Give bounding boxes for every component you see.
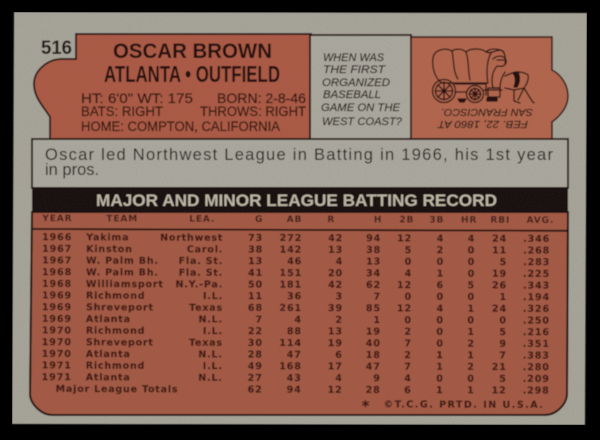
upside-down answer: FEB. 22, 1860 AT (437, 118, 528, 129)
row: 1969 Richmond: 3 (335, 291, 343, 302)
row: 1968 W. Palm Bh.: Fla. St. (179, 268, 223, 279)
row: 1967 W. Palm Bh.: 5 (500, 257, 507, 268)
row: 1969 Richmond (42, 290, 550, 303)
copyright line (362, 397, 544, 416)
upside-down answer: SAN FRANCISCO. (441, 106, 533, 117)
row: 1969 Atlanta: 0 (404, 315, 412, 326)
throws: THROWS: RIGHT (200, 104, 306, 119)
row: 1970 Atlanta: 1 (436, 350, 444, 361)
row: 1971 Atlanta: Atlanta (86, 372, 131, 383)
row: 1970 Shreveport: Texas (189, 338, 223, 349)
row: 1970 Shreveport: 30 (248, 338, 263, 349)
row: Major League Totals: Major League Totals (56, 384, 178, 395)
row: 1970 Richmond: 1 (467, 327, 475, 338)
row: 1969 Atlanta: 1969 (42, 314, 72, 325)
row: 1968 Williamsport: 5 (468, 280, 475, 291)
row: 1970 Richmond: 2 (404, 327, 412, 338)
table header: 2B (399, 215, 414, 225)
row: 1968 W. Palm Bh.: 34 (366, 268, 381, 279)
panel: batting record table background (30, 212, 568, 415)
row: 1969 Shreveport: 24 (492, 304, 507, 315)
row: 1970 Shreveport: 40 (366, 338, 381, 349)
row: 1970 Atlanta: 1 (467, 350, 475, 361)
row: 1967 Kinston: Carol. (187, 244, 223, 255)
row: 1970 Shreveport: 0 (436, 338, 444, 350)
row: 1967 W. Palm Bh.: Fla. St. (179, 256, 223, 267)
row: 1969 Shreveport: 12 (397, 303, 412, 314)
row: 1969 Shreveport: 39 (328, 303, 343, 314)
row: 1967 Kinston: Kinston (86, 244, 133, 255)
row: 1966 Yakima: Northwest (160, 233, 223, 244)
row: 1968 Williamsport: 26 (492, 280, 507, 291)
row: 1967 Kinston: 5 (405, 245, 412, 256)
row: 1971 Richmond: 17 (328, 361, 343, 372)
row: 1968 W. Palm Bh.: 1 (437, 268, 444, 280)
row: 1971 Richmond: 47 (366, 362, 381, 373)
row: Major League Totals: 28 (366, 385, 381, 396)
row: 1968 Williamsport: .343 (523, 280, 550, 292)
height and weight: HT: 6'0" WT: 175 (81, 91, 193, 106)
heading bar (32, 187, 568, 213)
icon: covered wagon (432, 49, 534, 103)
row: 1969 Richmond: Richmond (86, 291, 145, 302)
row: 1970 Atlanta: 1970 (42, 349, 72, 360)
row: 1966 Yakima: 12 (397, 233, 412, 244)
row: 1969 Richmond: 0 (436, 292, 444, 303)
row: 1971 Richmond: Richmond (86, 361, 145, 372)
panel: trivia question: BASEBALL (323, 89, 381, 101)
table (32, 214, 568, 416)
row: 1968 W. Palm Bh.: 4 (405, 268, 412, 279)
row: 1970 Atlanta: N.L. (198, 349, 223, 360)
row: 1971 Atlanta: 9 (373, 373, 381, 384)
row: 1968 Williamsport: 42 (328, 280, 343, 291)
row: 1969 Atlanta: 0 (467, 315, 475, 326)
row: 1967 W. Palm Bh.: 4 (336, 256, 343, 267)
row: 1967 Kinston: 13 (328, 245, 343, 256)
row: 1970 Atlanta: .383 (523, 350, 550, 362)
table header: H (374, 215, 382, 225)
row: 1970 Richmond: 22 (248, 326, 263, 337)
team and position: ATLANTA • OUTFIELD (104, 61, 280, 87)
row: 1967 Kinston: 0 (468, 245, 475, 256)
panel: trivia question: ORGANIZED (322, 77, 390, 89)
row: 1970 Richmond: 13 (328, 326, 343, 337)
row: 1970 Shreveport: 7 (404, 338, 412, 349)
row: 1970 Richmond: .216 (523, 327, 550, 338)
table header: RBI (490, 216, 510, 226)
panel: trivia question: GAME ON THE (321, 102, 401, 114)
row: Major League Totals: 1 (467, 385, 475, 396)
row: 1970 Shreveport: 9 (499, 339, 507, 350)
row: 1966 Yakima: 4 (437, 233, 444, 245)
row: 1969 Shreveport: Shreveport (86, 302, 154, 313)
row: 1968 W. Palm Bh.: 1968 (42, 267, 72, 278)
panel: trivia question: THE FIRST (323, 64, 386, 76)
row: 1971 Atlanta: 0 (467, 374, 475, 385)
row: 1971 Atlanta: 43 (287, 373, 302, 384)
row: 1967 W. Palm Bh.: 46 (287, 256, 302, 267)
row: 1969 Richmond: 0 (467, 292, 475, 303)
row: 1970 Richmond: 0 (436, 327, 444, 338)
row: 1970 Atlanta: 7 (499, 350, 507, 361)
row: 1968 W. Palm Bh.: W. Palm Bh. (86, 267, 159, 279)
row: 1968 Williamsport: 181 (280, 280, 302, 291)
row: 1970 Shreveport: .351 (523, 339, 550, 350)
row: 1969 Richmond: I.L. (203, 291, 223, 302)
row: 1971 Atlanta: 27 (248, 373, 263, 384)
row: 1971 Richmond (42, 360, 550, 373)
row: 1968 Williamsport: N.Y.-Pa. (175, 279, 223, 290)
row: 1967 W. Palm Bh.: 0 (468, 257, 475, 268)
row: 1968 W. Palm Bh.: 151 (280, 268, 302, 279)
row: 1966 Yakima: 24 (492, 234, 507, 245)
table header: G (255, 215, 263, 225)
row: 1971 Richmond: 21 (492, 362, 507, 373)
table header: LEA. (189, 215, 215, 225)
row: 1968 W. Palm Bh.: 0 (468, 269, 475, 280)
row: 1971 Richmond: 7 (404, 362, 412, 373)
row: 1971 Atlanta: N.L. (198, 373, 223, 384)
row: 1966 Yakima: 4 (468, 234, 475, 245)
panel: trivia question: WEST COAST? (322, 116, 403, 128)
row: 1968 W. Palm Bh.: 41 (248, 268, 263, 279)
card number: 516 (41, 37, 72, 59)
row: 1968 Williamsport: Williamsport (86, 279, 164, 290)
row: 1968 W. Palm Bh.: 19 (492, 269, 507, 280)
row: 1970 Atlanta: Atlanta (86, 349, 131, 360)
table header: R (327, 215, 335, 225)
panel: trivia answer (411, 37, 568, 140)
row: 1967 Kinston (42, 244, 550, 257)
row: 1971 Richmond: 1971 (42, 360, 72, 372)
panel: biography note: in pros. (45, 161, 99, 179)
row: 1969 Shreveport: 261 (279, 303, 302, 314)
row: 1966 Yakima: 42 (328, 233, 343, 244)
row: 1967 Kinston: 11 (492, 245, 507, 256)
row: 1968 W. Palm Bh.: 20 (328, 268, 343, 279)
row: 1969 Richmond: 1 (499, 292, 507, 303)
row: 1968 Williamsport: 62 (366, 280, 381, 291)
row: 1969 Atlanta: 0 (436, 315, 444, 326)
row: 1969 Richmond: 7 (373, 292, 381, 303)
table header: HR (461, 216, 477, 226)
player name: OSCAR BROWN (113, 40, 272, 63)
heading bar: MAJOR AND MINOR LEAGUE BATTING RECORD (96, 191, 497, 210)
row: 1967 W. Palm Bh.: 13 (366, 257, 381, 268)
row: 1969 Richmond: 0 (404, 292, 412, 303)
row: 1971 Richmond: .280 (523, 362, 550, 373)
row: 1967 Kinston: .268 (523, 245, 550, 257)
copyright line: * (362, 397, 370, 415)
row: Major League Totals: 6 (404, 385, 412, 396)
row: Major League Totals: 62 (248, 385, 263, 396)
row: 1969 Atlanta: Atlanta (86, 314, 131, 325)
row: 1969 Shreveport: 1969 (42, 302, 72, 313)
row: 1967 W. Palm Bh.: 13 (248, 256, 263, 267)
row: 1969 Richmond: 1969 (42, 290, 72, 302)
row: 1968 Williamsport: 12 (397, 280, 412, 291)
row: 1969 Shreveport: 1 (467, 304, 475, 315)
row: 1971 Atlanta: .209 (523, 374, 550, 385)
row: 1970 Shreveport: 1970 (42, 337, 72, 348)
row: 1970 Shreveport: 19 (328, 338, 343, 349)
row: 1969 Richmond: .194 (523, 292, 550, 303)
row: 1970 Richmond: 19 (366, 327, 381, 338)
row: 1969 Atlanta: 7 (255, 315, 263, 326)
row: 1969 Atlanta: N.L. (198, 314, 223, 325)
row: 1970 Richmond: 1970 (42, 325, 72, 337)
row: 1969 Shreveport: .326 (523, 304, 550, 315)
table header (32, 214, 568, 232)
bats: BATS: RIGHT (81, 104, 163, 119)
row: Major League Totals: 1 (436, 385, 444, 396)
row: 1970 Richmond: 88 (287, 326, 302, 337)
row: Major League Totals (56, 384, 550, 397)
row: 1970 Atlanta: 47 (287, 350, 302, 361)
row: 1970 Atlanta: 6 (335, 350, 343, 361)
row: 1970 Richmond: I.L. (203, 326, 223, 337)
row: Major League Totals: 12 (328, 385, 343, 396)
row: 1966 Yakima: .346 (523, 234, 550, 245)
row: 1969 Richmond: 11 (248, 291, 263, 302)
row: 1971 Atlanta (42, 372, 550, 385)
row: 1970 Richmond: 5 (499, 327, 507, 338)
row: 1970 Atlanta: 2 (404, 350, 412, 361)
row: 1970 Richmond (42, 325, 550, 338)
row: 1967 W. Palm Bh. (42, 255, 550, 268)
row: 1971 Richmond: 168 (279, 361, 302, 372)
row: 1970 Atlanta: 28 (248, 350, 263, 361)
row: 1966 Yakima: 94 (366, 233, 381, 244)
row: 1967 Kinston: 142 (280, 245, 302, 256)
row: 1969 Shreveport (42, 302, 550, 315)
row: 1968 Williamsport: 50 (248, 280, 263, 291)
row: 1970 Atlanta: 18 (366, 350, 381, 361)
table header: 3B (429, 215, 444, 226)
row: Major League Totals: 94 (287, 385, 302, 396)
row: 1969 Shreveport: Texas (189, 303, 223, 314)
table header: YEAR (41, 214, 72, 224)
row: 1970 Shreveport: 114 (279, 338, 302, 349)
row: 1971 Atlanta: 1971 (42, 372, 72, 383)
panel: biography note (32, 139, 568, 188)
table header: AVG. (527, 216, 554, 226)
row: 1969 Atlanta: .250 (523, 315, 550, 327)
row: 1967 W. Palm Bh.: 1967 (42, 255, 72, 267)
row: 1969 Shreveport: 85 (366, 303, 381, 314)
row: 1968 W. Palm Bh. (42, 267, 550, 280)
row: 1968 W. Palm Bh.: .225 (523, 269, 550, 280)
row: 1969 Atlanta (42, 314, 550, 327)
row: 1969 Atlanta: 2 (335, 315, 343, 326)
row: 1968 Williamsport: 6 (437, 280, 444, 291)
row: 1967 W. Palm Bh.: 0 (405, 257, 412, 268)
birth date: BORN: 2-8-46 (217, 91, 306, 106)
row: 1967 Kinston: 38 (366, 245, 381, 256)
row: 1970 Richmond: Richmond (86, 326, 145, 337)
row: 1967 Kinston: 1967 (42, 244, 72, 255)
row: 1966 Yakima: 1966 (42, 232, 72, 243)
row: 1969 Atlanta: 4 (294, 315, 302, 326)
panel: biography note: Oscar led Northwest League in Batting in 1966, his 1st year (45, 146, 554, 164)
row: 1967 W. Palm Bh.: 0 (437, 257, 444, 268)
row: Major League Totals: 12 (492, 385, 507, 396)
row: 1971 Richmond: 1 (436, 362, 444, 373)
row: 1970 Shreveport (42, 337, 550, 350)
row: 1971 Richmond: 2 (467, 362, 475, 373)
row: 1969 Richmond: 36 (287, 291, 302, 302)
row: 1971 Atlanta: 4 (404, 373, 412, 384)
row: 1971 Richmond: I.L. (203, 361, 223, 372)
row: 1971 Richmond: 49 (248, 361, 263, 372)
row: 1966 Yakima: Yakima (85, 232, 129, 243)
row: 1971 Atlanta: 0 (436, 373, 444, 385)
panel: player info (34, 34, 311, 139)
row: 1970 Shreveport: 2 (467, 339, 475, 350)
copyright line: ©T.C.G. PRTD. IN U.S.A. (384, 399, 544, 411)
row: 1969 Atlanta: 0 (499, 315, 507, 326)
home town: HOME: COMPTON, CALIFORNIA (81, 119, 280, 134)
row: 1968 Williamsport (42, 279, 550, 292)
row: 1971 Atlanta: 5 (499, 374, 507, 385)
row: 1969 Shreveport: 4 (436, 303, 444, 315)
upside-down answer (437, 106, 533, 129)
row: 1969 Shreveport: 68 (248, 303, 263, 314)
row: 1969 Atlanta: 1 (373, 315, 381, 326)
row: Major League Totals: .298 (523, 385, 550, 397)
row: 1966 Yakima (42, 232, 550, 245)
row: 1967 W. Palm Bh.: .283 (523, 257, 550, 268)
row: 1970 Atlanta (42, 349, 550, 362)
row: 1966 Yakima: 272 (280, 233, 302, 244)
row: 1970 Shreveport: Shreveport (86, 337, 154, 348)
row: 1971 Atlanta: 4 (335, 373, 343, 384)
row: 1966 Yakima: 73 (248, 233, 263, 244)
panel: trivia question: WHEN WAS (323, 52, 385, 64)
row: 1967 Kinston: 38 (248, 245, 263, 256)
table header: TEAM (106, 214, 138, 224)
panel: trivia question (310, 35, 411, 140)
row: 1968 Williamsport: 1968 (42, 279, 72, 290)
row: 1967 W. Palm Bh.: W. Palm Bh. (86, 256, 159, 267)
table header: AB (287, 215, 302, 225)
row: 1967 Kinston: 2 (437, 245, 444, 256)
